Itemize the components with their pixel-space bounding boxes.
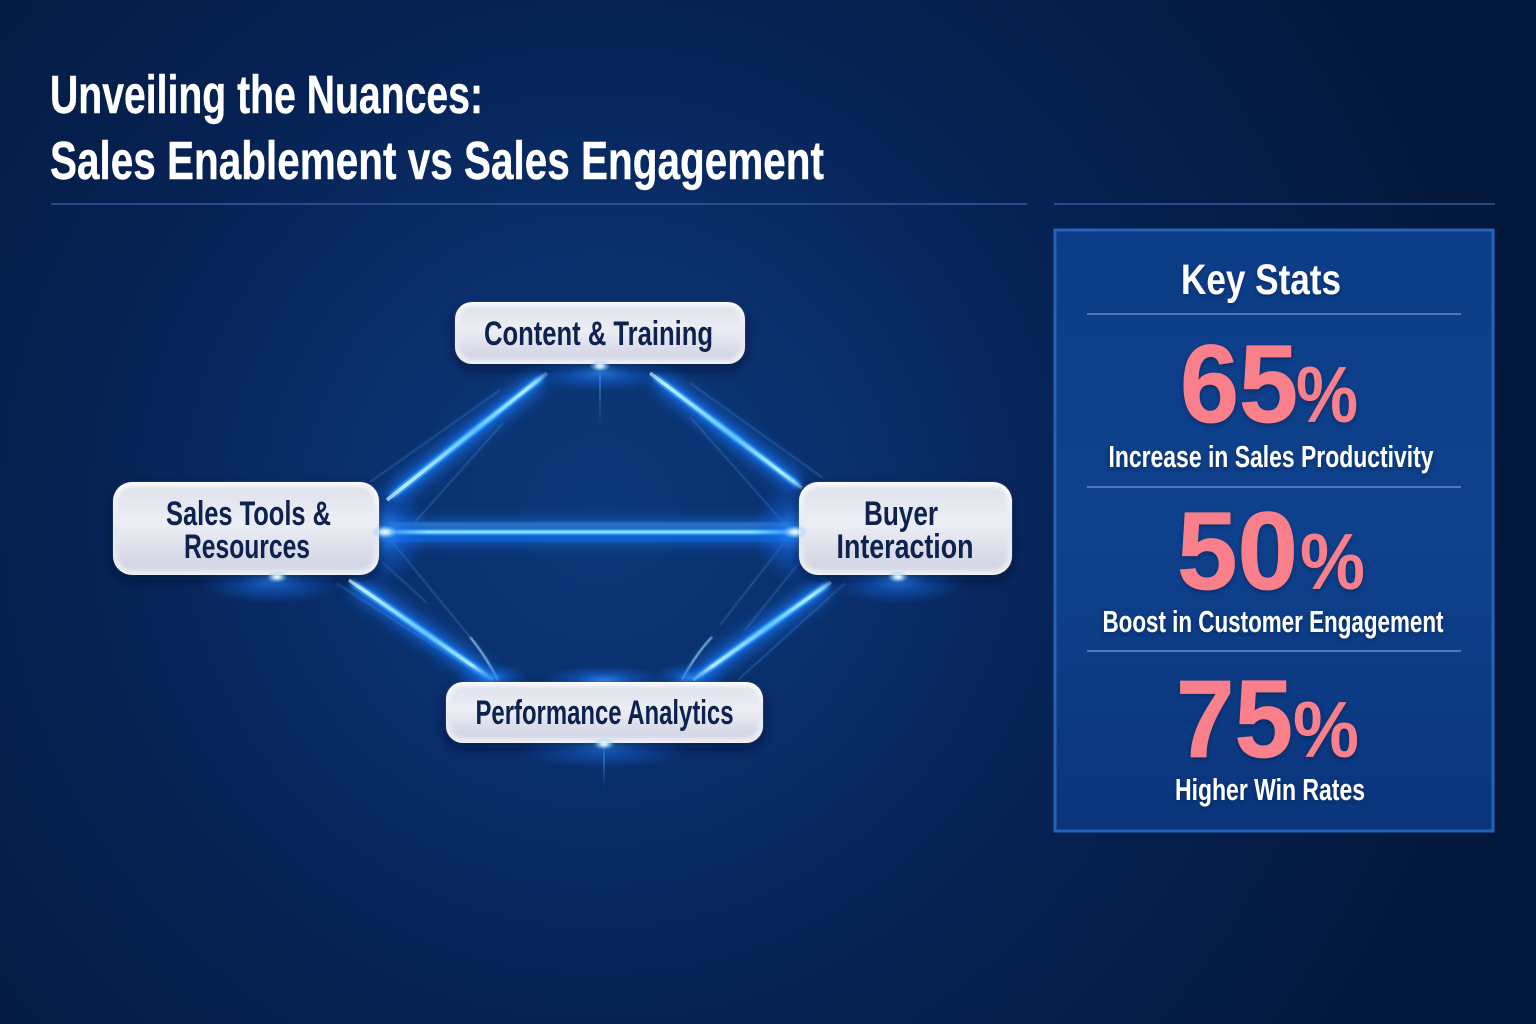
title: Sales Enablement vs Sales Engagement (50, 131, 824, 191)
node: Performance Analytics: Performance Analytics (476, 694, 734, 732)
stat: 65% (1108, 323, 1434, 474)
node: Buyer Interaction (799, 482, 1012, 575)
diagram connector lines (336, 366, 845, 790)
title (50, 65, 824, 191)
node glows (196, 352, 968, 768)
stat: 75%: % (1293, 685, 1359, 774)
node: Sales Tools & Resources: Sales Tools & (166, 495, 331, 533)
stat: 50%: 50 (1177, 490, 1298, 613)
title: Unveiling the Nuances: (50, 65, 483, 125)
heading: key stats: Key Stats (1181, 256, 1341, 304)
light sparks (266, 360, 909, 750)
stat: 65%: 65 (1180, 323, 1298, 446)
stat: 75%: Higher Win Rates (1175, 772, 1365, 807)
node: Performance Analytics (446, 682, 763, 743)
node: Buyer Interaction: Buyer (864, 495, 938, 533)
node: Sales Tools & Resources: Resources (184, 528, 310, 566)
stat: 65%: Increase in Sales Productivity (1108, 439, 1434, 474)
stat: 50% (1102, 490, 1444, 639)
stat: 75% (1175, 658, 1365, 807)
stat: 65%: % (1296, 350, 1358, 439)
stat: 50%: % (1300, 517, 1365, 606)
node: Buyer Interaction: Interaction (836, 528, 974, 566)
node: Content & Training (455, 302, 745, 364)
panel: key stats (1055, 230, 1493, 831)
node: Sales Tools & Resources (113, 482, 379, 575)
stat: 75%: 75 (1176, 658, 1293, 781)
node: Content & Training: Content & Training (484, 315, 713, 353)
